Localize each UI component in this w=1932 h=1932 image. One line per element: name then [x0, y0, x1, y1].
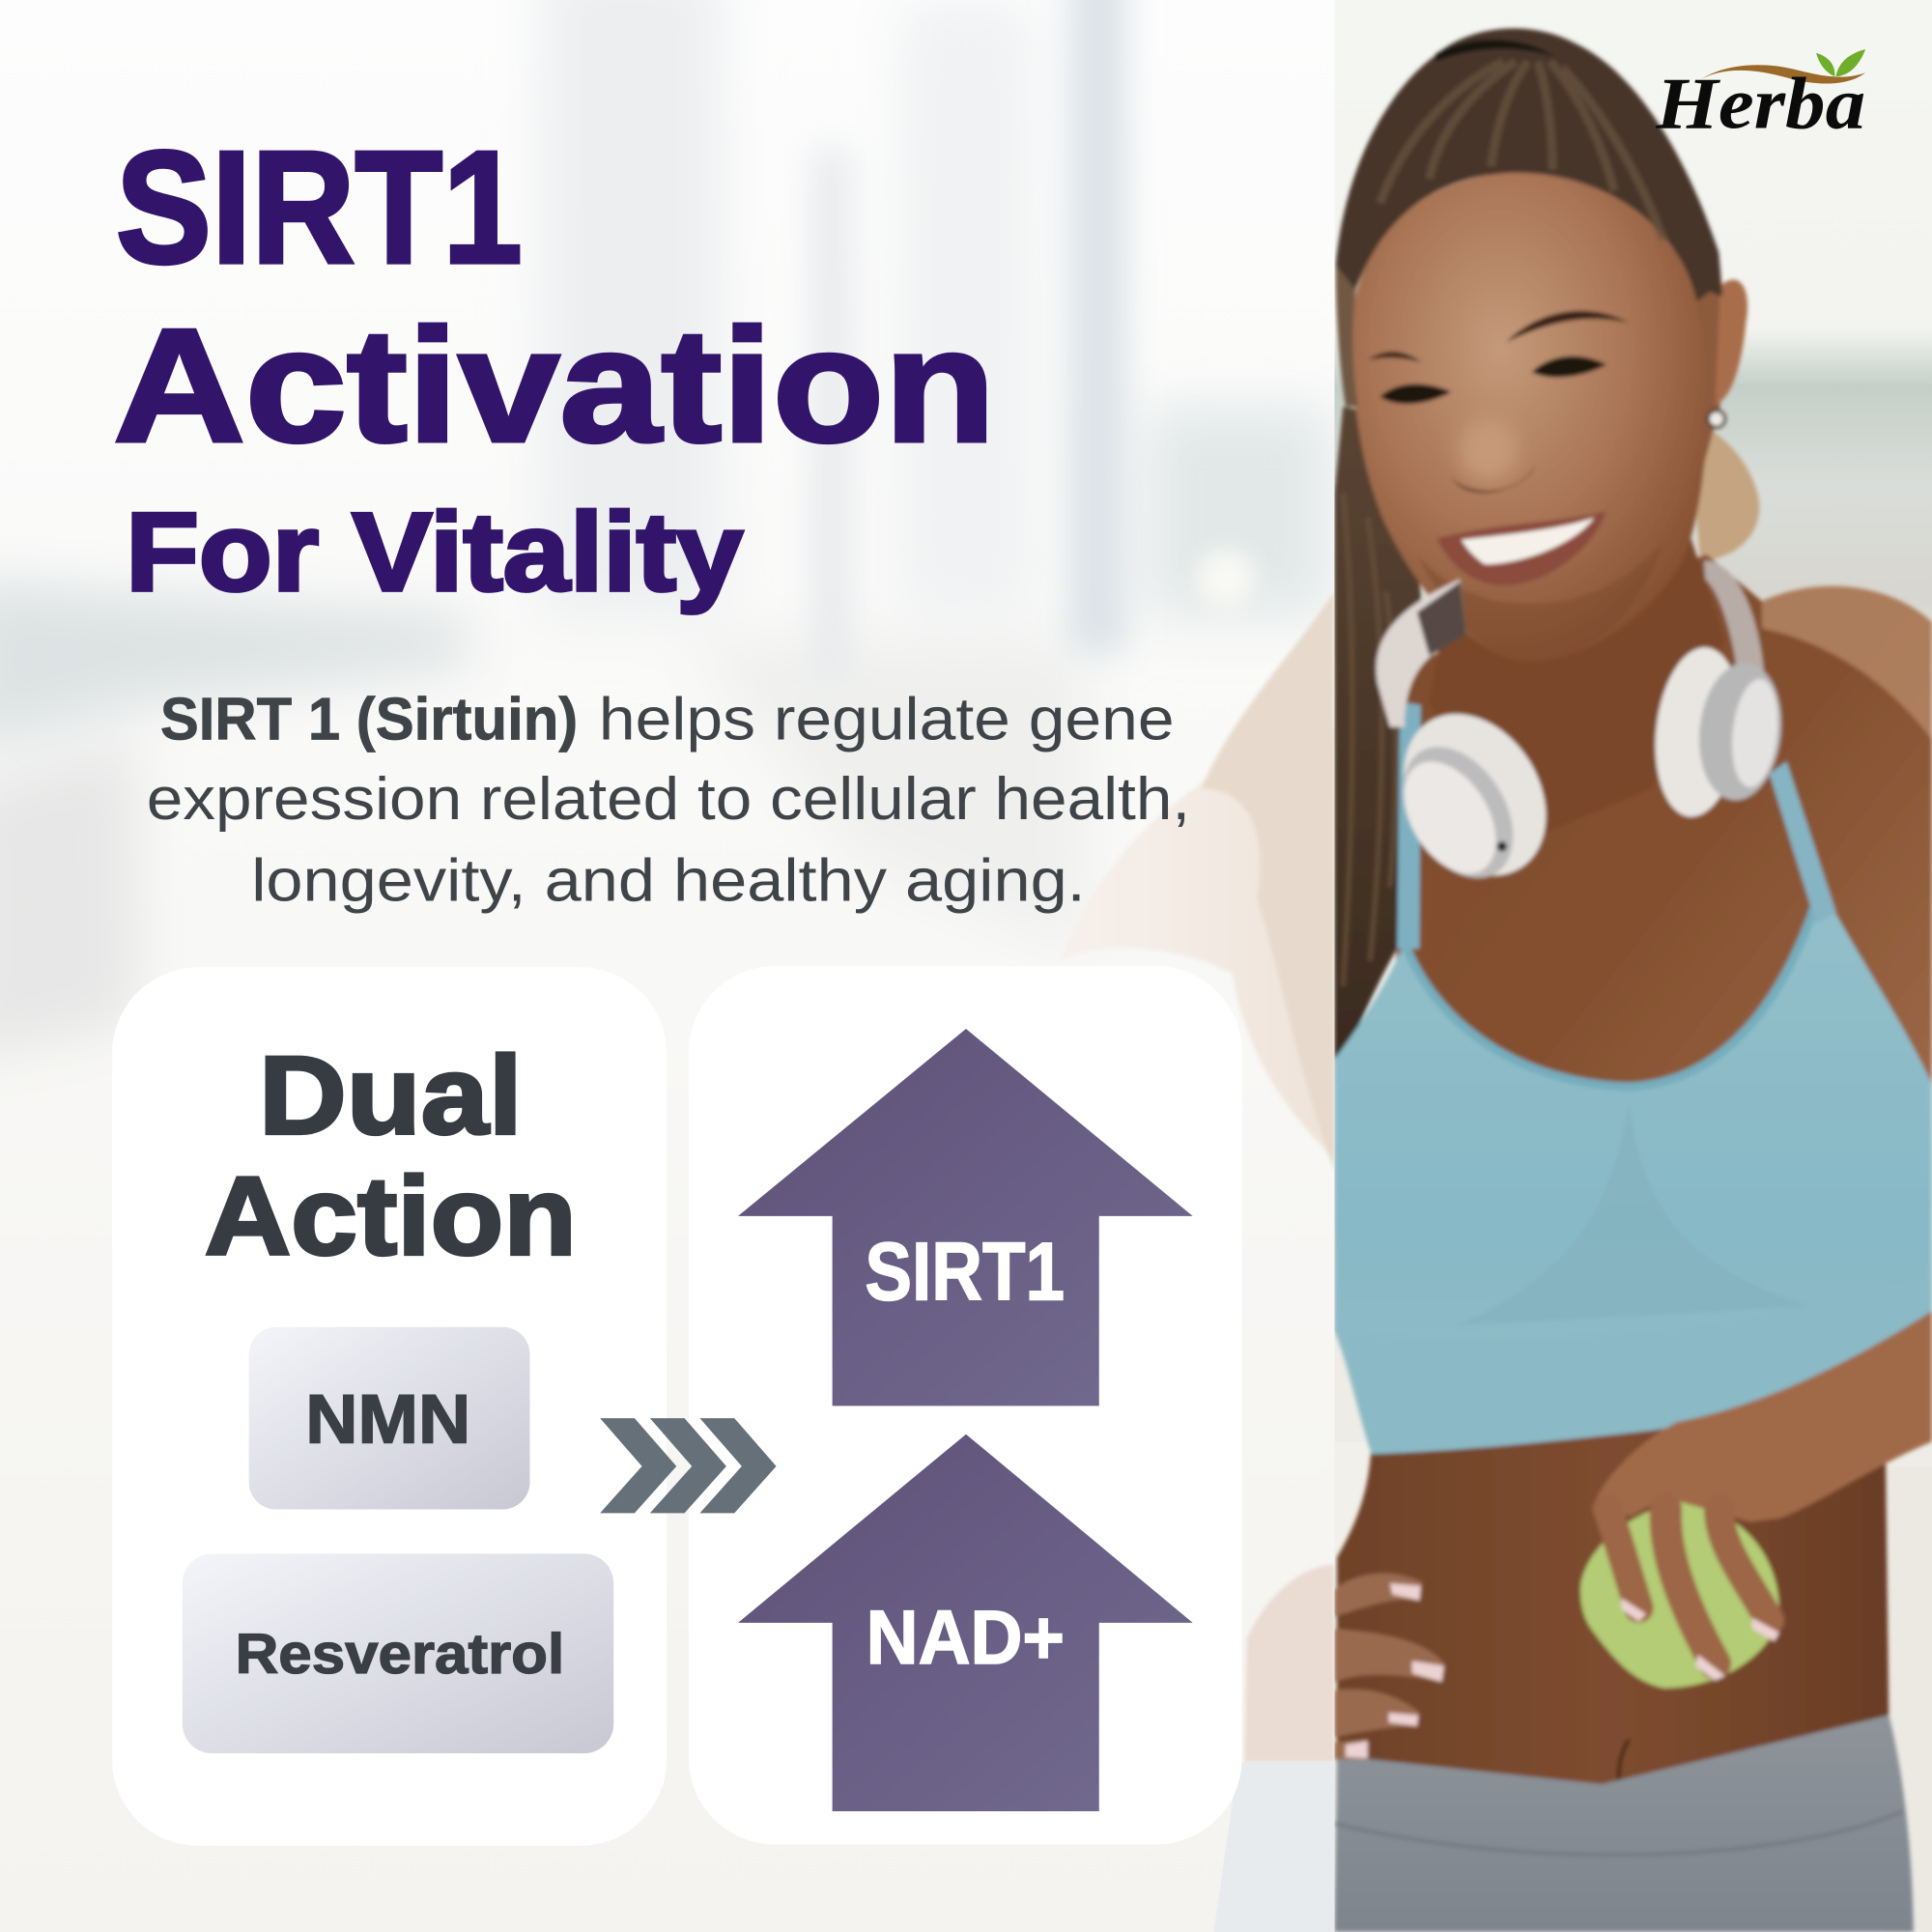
hair strands top — [1380, 62, 1663, 241]
line 3: longevity, and healthy aging. — [251, 846, 1086, 914]
fingers — [1608, 1509, 1770, 1663]
apple — [1580, 1501, 1779, 1688]
jack — [1497, 841, 1507, 851]
intro paragraph — [147, 685, 1190, 914]
headphone band left — [1377, 579, 1466, 727]
right ear cup — [1647, 643, 1789, 825]
pants — [1334, 1716, 1914, 1932]
sports bra — [1334, 887, 1932, 1454]
chip: NMN: NMN — [305, 1381, 470, 1459]
arrow: SIRT1 up — [738, 1029, 1193, 1406]
chip: Resveratrol: Resveratrol — [236, 1623, 564, 1686]
left strap — [1397, 702, 1421, 949]
logo wordmark: Herba — [1655, 63, 1865, 145]
left ear cup — [1369, 688, 1575, 906]
hair band — [1435, 40, 1555, 62]
heading: dual action: Dual — [259, 1034, 523, 1157]
right strap — [1770, 761, 1836, 924]
chip: NMN — [249, 1327, 529, 1509]
heading: dual action: Action — [205, 1154, 577, 1278]
left hand fingers — [1334, 1574, 1444, 1759]
panel: outcomes — [689, 966, 1242, 1844]
chip: Resveratrol — [183, 1553, 613, 1753]
arrow: triple chevron — [600, 1418, 777, 1513]
earring — [1707, 409, 1726, 429]
title line: SIRT1: SIRT1 — [116, 119, 523, 298]
neck shadow — [1435, 537, 1719, 827]
heading: dual action — [205, 1034, 577, 1278]
hair strands — [1343, 493, 1396, 985]
arrow: NAD+ up: NAD+ — [867, 1594, 1065, 1680]
forehead hair backing — [1553, 174, 1712, 301]
belly — [1337, 1417, 1889, 1786]
brows — [1368, 311, 1629, 362]
arrow: SIRT1 up: SIRT1 — [865, 1227, 1065, 1319]
title line: For Vitality: For Vitality — [126, 491, 743, 614]
eyes — [1380, 356, 1606, 404]
ponytail — [1334, 407, 1430, 1078]
chest and shoulders — [1392, 554, 1932, 1244]
navel — [1619, 1740, 1629, 1781]
head backing — [1694, 289, 1723, 460]
bra band — [1343, 1276, 1932, 1454]
hair top — [1336, 28, 1722, 296]
nose highlight — [1459, 417, 1518, 482]
photo: sky and beach behind woman — [1334, 0, 1932, 1932]
line 2: expression related to cellular health, — [147, 765, 1190, 833]
line 1: helps regulate gene — [599, 685, 1175, 753]
face — [1352, 173, 1708, 662]
forearm and back of hand — [1592, 1311, 1932, 1521]
lips — [1436, 511, 1606, 585]
panel: dual action — [112, 967, 667, 1846]
nails — [1346, 1583, 1779, 1758]
logo swoosh — [1701, 65, 1865, 84]
bra mesh panel — [1454, 1096, 1811, 1325]
headphone band right — [1704, 560, 1765, 678]
logo leaves — [1816, 49, 1865, 76]
washed figure behind panels — [1060, 591, 1334, 1932]
teeth — [1462, 518, 1595, 564]
temple hair — [1336, 265, 1358, 407]
blonde hair behind neck — [1688, 419, 1759, 562]
washed background photo — [0, 0, 1334, 1932]
title line: Activation: Activation — [113, 297, 996, 476]
chin shade — [1417, 542, 1663, 662]
ear — [1716, 280, 1747, 404]
logo: Herba — [1655, 49, 1865, 145]
nose underside — [1452, 466, 1535, 493]
title — [113, 119, 996, 614]
bold term: SIRT 1 (Sirtuin) — [160, 685, 578, 753]
arrow: NAD+ up — [738, 1435, 1193, 1811]
bra trim — [1405, 887, 1821, 1087]
shoulder highlight — [1762, 585, 1932, 739]
photo: woman — [1334, 28, 1932, 1932]
